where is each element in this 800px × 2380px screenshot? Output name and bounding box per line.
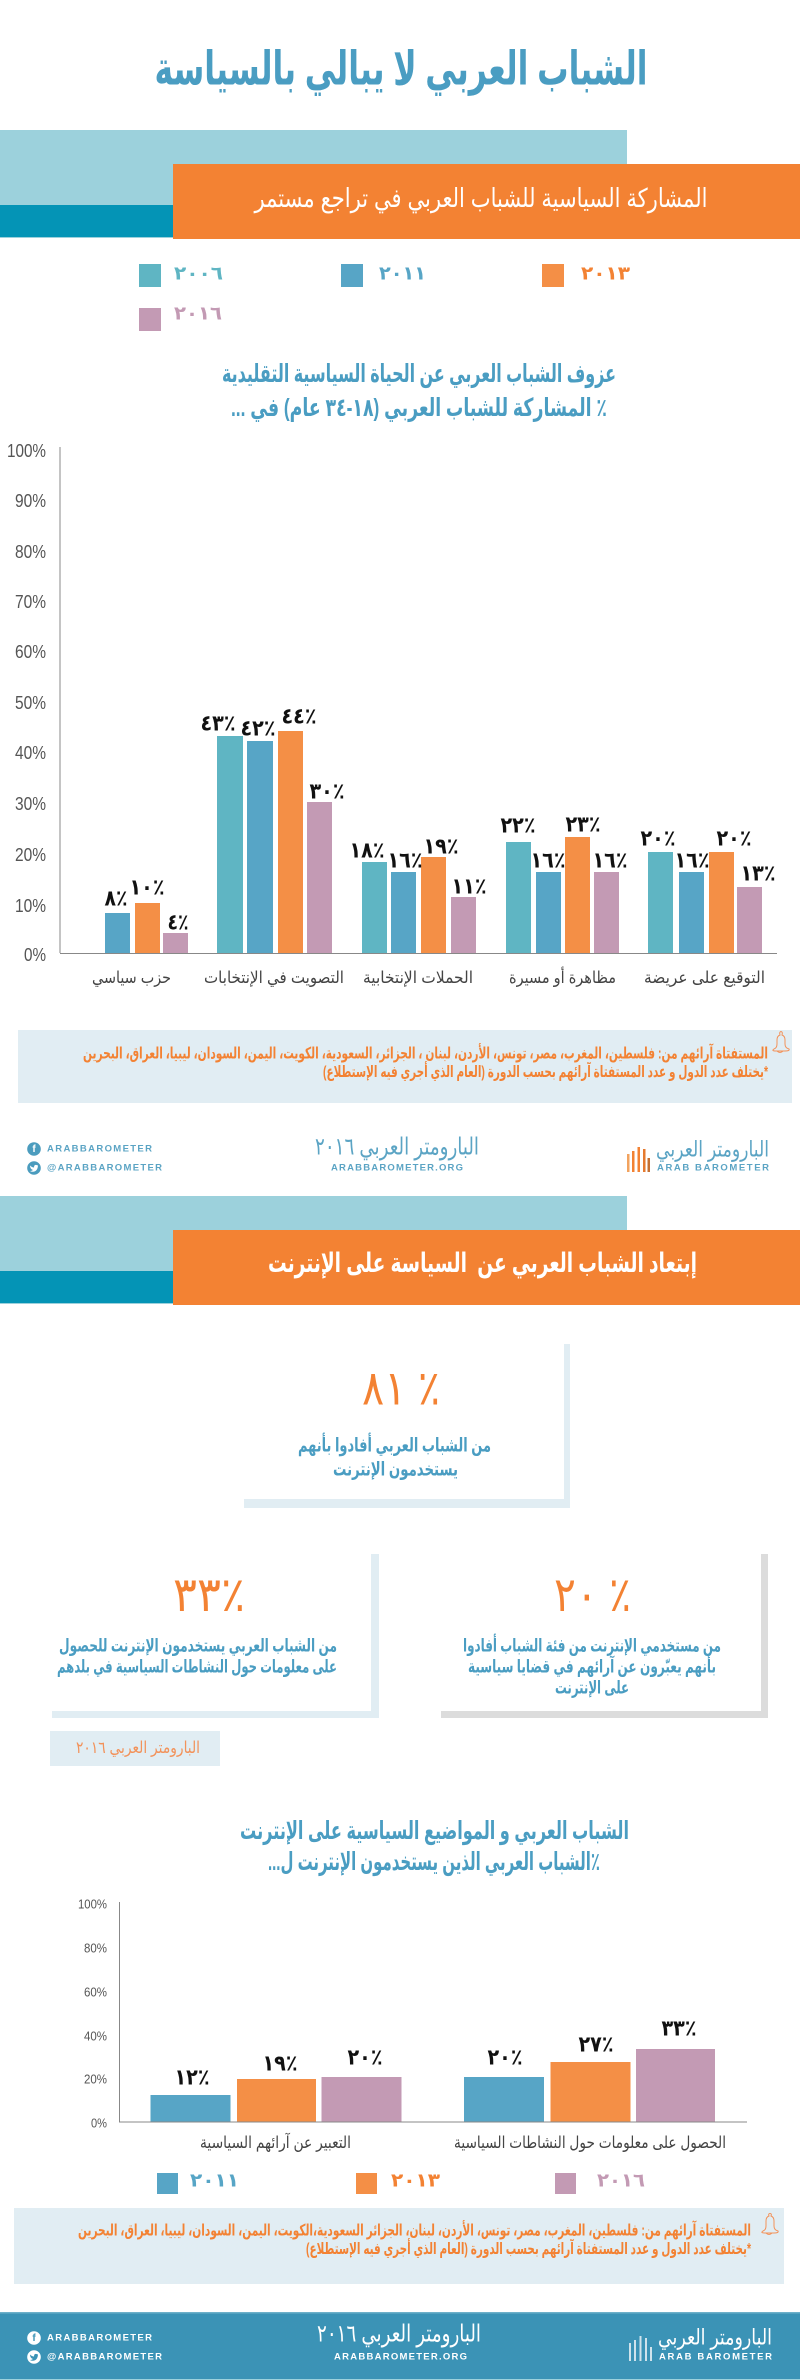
legend: chart 1 years: ٢٠٠٦ xyxy=(174,264,223,284)
note panel 2 xyxy=(14,2208,784,2284)
bars: voting in elections: ٣٠٪ xyxy=(310,778,344,804)
bars: voting in elections: ٤٢٪ xyxy=(240,716,276,740)
stat card: 33%: من الشباب العربي يستخدمون الإنترنت للحصول xyxy=(59,1636,337,1656)
bar chart: online political topics xyxy=(78,1896,747,2153)
logo wordmark latin: ARAB BAROMETER xyxy=(657,1162,769,1174)
legend: chart 1 years xyxy=(139,264,630,331)
bars: expressing opinions: ١٢٪ xyxy=(174,2064,210,2090)
y axis labels: 100% xyxy=(7,441,46,461)
edition title: البارومتر العربي ٢٠١٦ xyxy=(317,2320,481,2348)
edition title: البارومتر العربي ٢٠١٦ xyxy=(315,1134,479,1160)
stat card: 33%: على معلومات حول النشاطات السياسية في بلدهم xyxy=(57,1656,337,1678)
note panel 1 xyxy=(18,1030,792,1103)
bars: signing a petition: ١٣٪ xyxy=(740,860,776,886)
logo wordmark arabic: البارومتر العربي xyxy=(656,1136,769,1162)
bars: signing a petition: ٢٠٪ xyxy=(716,826,752,850)
section header: political participation xyxy=(0,130,800,239)
bars: political party xyxy=(104,874,188,953)
footer band xyxy=(0,2312,800,2380)
y axis labels: 80% xyxy=(84,1940,107,1956)
y axis labels: 30% xyxy=(15,794,46,814)
category labels xyxy=(200,2133,726,2153)
stat card: 81%: ٨١ ٪ xyxy=(362,1362,440,1416)
y axis labels: 100% xyxy=(78,1896,107,1912)
y axis labels xyxy=(78,1896,107,2130)
stat card: 20%: ٢٠ ٪ xyxy=(554,1569,631,1622)
website: ARABBAROMETER.ORG xyxy=(334,2352,467,2362)
bars: getting information xyxy=(464,2016,715,2122)
category labels: التوقيع على عريضة xyxy=(644,969,765,988)
bars: demonstration or march: ١٦٪ xyxy=(530,848,566,872)
y axis labels: 80% xyxy=(15,542,46,562)
bars: getting information: ٢٠٪ xyxy=(488,2044,522,2070)
bar chart: traditional political participation xyxy=(7,441,777,988)
category labels: الحملات الإنتخابية xyxy=(363,969,473,987)
section header: online politics xyxy=(0,1196,800,1305)
website: ARABBAROMETER.ORG xyxy=(331,1162,463,1174)
section header: political participation: المشاركة السياسية للشباب العربي في تراجع مستمر xyxy=(253,183,708,214)
bars: demonstration or march xyxy=(500,812,628,953)
icon: bell xyxy=(762,2214,778,2234)
stat card: 81%: من الشباب العربي أفادوا بأنهم xyxy=(298,1432,491,1456)
footer row 1: branding xyxy=(27,1134,769,1175)
legend: chart 2 years: ٢٠١٦ xyxy=(597,2170,645,2192)
bars: voting in elections: ٤٤٪ xyxy=(282,704,316,728)
y axis labels: 40% xyxy=(15,743,46,763)
y axis labels: 50% xyxy=(15,693,46,713)
icon: facebook xyxy=(27,1142,41,1156)
y axis labels: 60% xyxy=(84,1984,107,2000)
bars: expressing opinions: ١٩٪ xyxy=(262,2050,298,2076)
legend: chart 2 years xyxy=(157,2170,645,2194)
bars: voting in elections: ٤٣٪ xyxy=(200,710,236,736)
icon: bell xyxy=(773,1032,789,1052)
bars: political party: ٨٪ xyxy=(104,886,128,910)
bars: election campaigns: ١٨٪ xyxy=(350,838,384,862)
category labels: التعبير عن آرائهم السياسية xyxy=(200,2133,351,2153)
bars: election campaigns xyxy=(350,834,486,953)
icon: twitter xyxy=(27,2350,41,2364)
bars: demonstration or march: ١٦٪ xyxy=(592,848,628,872)
icon: facebook: f xyxy=(32,2333,36,2344)
stat card: 20% xyxy=(441,1554,768,1718)
social handle: twitter: @ARABBAROMETER xyxy=(47,2352,162,2362)
y axis labels: 10% xyxy=(15,896,46,916)
social handle: facebook: ARABBAROMETER xyxy=(47,1144,152,1154)
bars: election campaigns: ١١٪ xyxy=(452,874,486,898)
y axis labels: 20% xyxy=(15,845,46,865)
legend: chart 1 years: ٢٠١١ xyxy=(379,264,426,284)
social handle: twitter: @ARABBAROMETER xyxy=(47,1162,162,1174)
stat card: 81%: يستخدمون الإنترنت xyxy=(333,1460,458,1480)
chart 1 heading xyxy=(222,360,616,423)
bars: expressing opinions xyxy=(150,2044,402,2122)
source tag: البارومتر العربي ٢٠١٦ xyxy=(76,1739,200,1758)
category labels: التصويت في الإنتخابات xyxy=(204,969,344,988)
source tag xyxy=(50,1731,220,1766)
category labels: مظاهرة أو مسيرة xyxy=(509,966,616,988)
social handle: facebook: ARABBAROMETER xyxy=(47,2332,152,2344)
y axis labels: 40% xyxy=(84,2028,107,2044)
logo bars xyxy=(627,1147,650,1172)
bars: election campaigns: ١٩٪ xyxy=(424,834,458,858)
y axis labels xyxy=(7,441,46,965)
bars: signing a petition: ١٦٪ xyxy=(674,848,710,872)
bars: demonstration or march: ٢٣٪ xyxy=(566,812,600,836)
stat card: 20%: على الإنترنت xyxy=(555,1678,629,1698)
icon: facebook: f xyxy=(32,1144,36,1155)
icon: facebook xyxy=(27,2331,41,2345)
icon: twitter xyxy=(27,1161,41,1175)
y axis labels: 20% xyxy=(84,2072,107,2086)
y axis labels: 90% xyxy=(15,491,46,511)
category labels: حزب سياسي xyxy=(92,969,171,988)
bars: expressing opinions: ٢٠٪ xyxy=(348,2044,382,2070)
category labels: الحصول على معلومات حول النشاطات السياسية xyxy=(454,2134,726,2153)
stat card: 33%: ٣٣٪ xyxy=(173,1569,245,1622)
logo bars xyxy=(629,2336,652,2361)
legend: chart 1 years: ٢٠١٦ xyxy=(174,304,222,324)
legend: chart 1 years: ٢٠١٣ xyxy=(581,264,630,284)
y axis labels: 0% xyxy=(91,2116,107,2130)
chart 2 heading xyxy=(240,1817,629,1877)
bars: signing a petition: ٢٠٪ xyxy=(640,826,676,850)
bars: political party: ١٠٪ xyxy=(130,874,164,900)
category labels xyxy=(92,966,765,988)
bars: signing a petition xyxy=(640,826,776,953)
bars: election campaigns: ١٦٪ xyxy=(388,848,422,872)
bars: political party: ٤٪ xyxy=(168,910,188,934)
legend: chart 2 years: ٢٠١٣ xyxy=(391,2170,440,2192)
y axis labels: 0% xyxy=(24,945,46,965)
y axis labels: 70% xyxy=(15,592,46,612)
bars: getting information: ٣٣٪ xyxy=(662,2016,696,2040)
logo wordmark arabic: البارومتر العربي xyxy=(658,2324,772,2350)
y axis labels: 60% xyxy=(15,642,46,662)
stat card: 81% xyxy=(244,1344,570,1508)
bars: voting in elections xyxy=(200,704,344,953)
bars: getting information: ٢٧٪ xyxy=(578,2032,614,2056)
stat card: 33% xyxy=(52,1554,379,1718)
logo wordmark latin: ARAB BAROMETER xyxy=(659,2352,772,2362)
bars: demonstration or march: ٢٢٪ xyxy=(500,812,536,838)
chart 1 heading: ٪ المشاركة للشباب العربي (١٨-٣٤ عام) في ... xyxy=(231,394,607,423)
legend: chart 2 years: ٢٠١١ xyxy=(190,2170,239,2192)
